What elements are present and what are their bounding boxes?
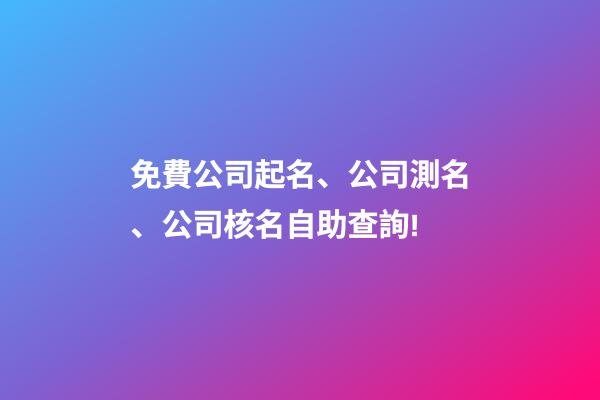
title line 1: 免費公司起名、公司測名: [130, 158, 472, 193]
title line 2: 、公司核名自助查詢!: [130, 208, 420, 242]
